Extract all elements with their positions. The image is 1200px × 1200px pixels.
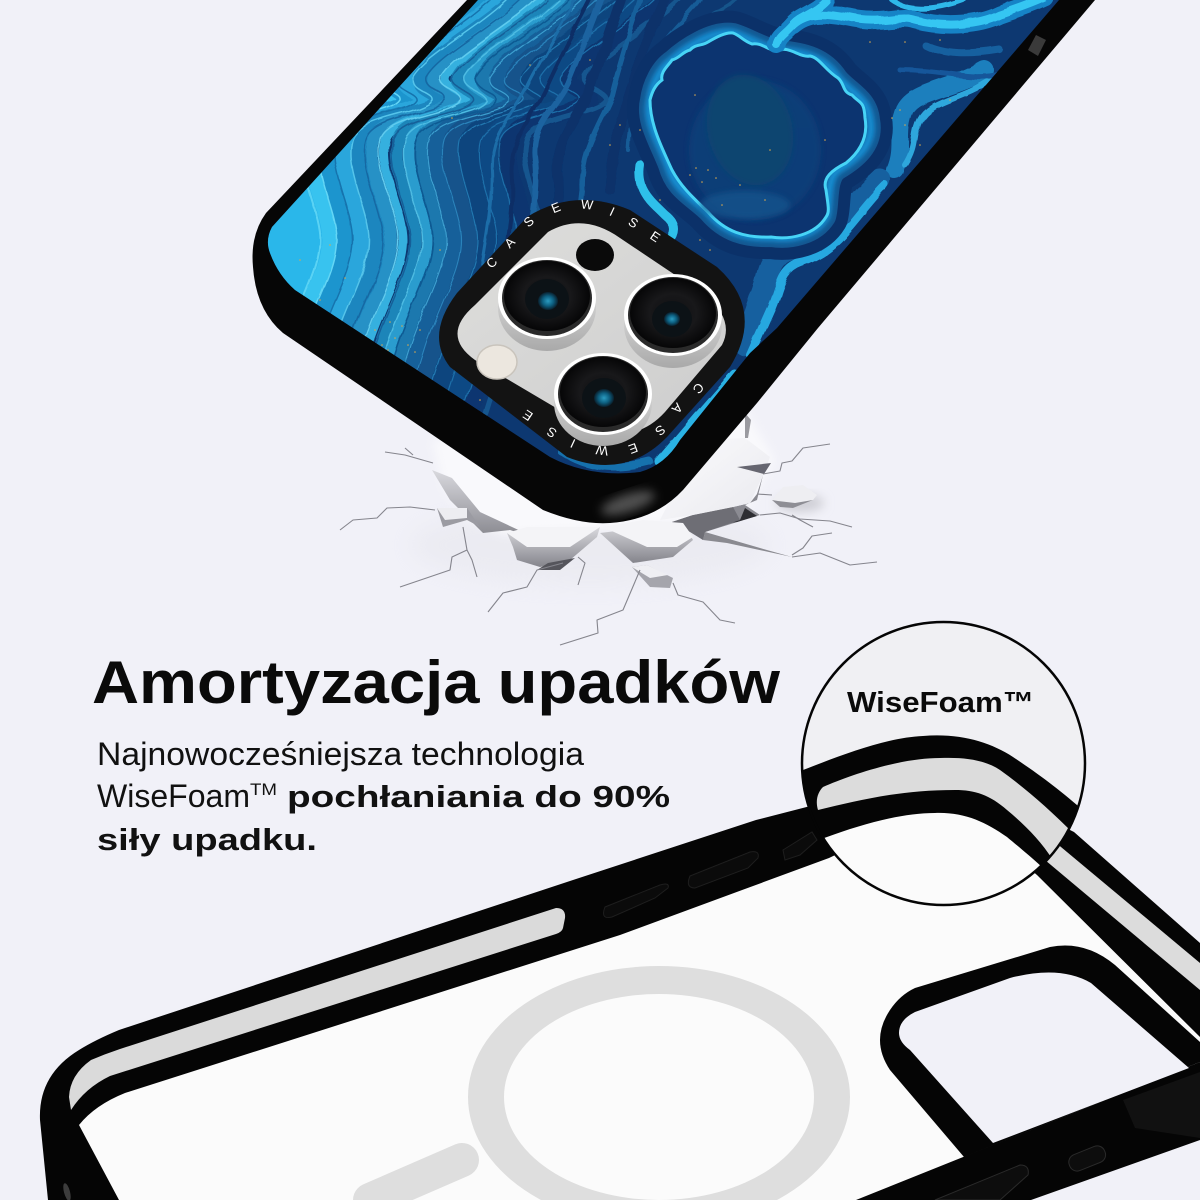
sensor hole — [576, 239, 614, 271]
brand lettering: E — [626, 440, 640, 457]
side button — [1028, 35, 1046, 56]
clear interior — [79, 800, 1200, 1200]
brand lettering: W — [580, 196, 595, 213]
gold speckles — [300, 40, 950, 400]
heading: Amortyzacja upadków — [92, 649, 780, 716]
brand lettering: A — [669, 400, 686, 417]
small chunk left — [437, 508, 480, 527]
lens three — [554, 353, 652, 446]
small chunk below — [632, 565, 673, 588]
description text: pochłaniania do 90% — [287, 779, 670, 814]
brand lettering: S — [626, 214, 641, 231]
camera cutout frame — [880, 945, 1200, 1157]
description text: WiseFoam — [97, 778, 250, 814]
camera cutout — [899, 973, 1189, 1143]
WiseFoam magnifier callout — [790, 622, 1085, 905]
cyan ribbons — [639, 0, 1045, 242]
description text: TM — [250, 780, 277, 799]
flash — [477, 345, 517, 379]
frame gap left — [69, 908, 565, 1110]
small chunk right — [772, 485, 824, 512]
marble artwork — [225, 0, 1080, 480]
brand lettering — [483, 196, 707, 459]
bottom ports — [935, 1143, 1108, 1200]
main chunk one — [507, 527, 600, 567]
black frame — [40, 770, 1200, 1200]
description text: siły upadku. — [97, 822, 317, 857]
brand lettering: C — [690, 380, 707, 397]
brand lettering: I — [607, 204, 617, 219]
description text — [97, 736, 670, 857]
brand lettering: W — [594, 442, 609, 459]
bottom phone clear case — [40, 770, 1200, 1200]
cracked surface — [340, 410, 877, 645]
brand lettering: C — [483, 254, 500, 271]
brand lettering: S — [520, 213, 537, 230]
brand lettering: E — [520, 407, 536, 424]
right bands — [895, 70, 985, 170]
callout label: WiseFoam™ — [847, 687, 1034, 719]
brand lettering: S — [652, 422, 668, 439]
magnetic ring — [468, 966, 850, 1200]
main chunk two — [600, 520, 693, 563]
agate geode — [649, 33, 871, 238]
frame gap right — [1045, 842, 1200, 990]
brand lettering: A — [501, 234, 518, 251]
magnified case corner — [790, 735, 1085, 905]
corner highlight — [599, 486, 657, 520]
camera island — [439, 196, 745, 465]
description text: Najnowocześniejsza technologia — [97, 736, 584, 772]
brand lettering: E — [647, 228, 663, 245]
magnetic pill — [370, 1160, 462, 1200]
crack lines — [340, 444, 877, 645]
lens one — [498, 257, 596, 351]
brand lettering: E — [549, 199, 563, 216]
left port — [62, 1183, 72, 1200]
case bumper — [253, 0, 1095, 523]
side buttons — [604, 832, 817, 918]
top phone with marble case — [225, 0, 1095, 523]
brand lettering: I — [568, 436, 578, 451]
lens two — [624, 274, 722, 368]
brand lettering: S — [544, 424, 559, 441]
edge hatch — [1123, 1072, 1200, 1138]
